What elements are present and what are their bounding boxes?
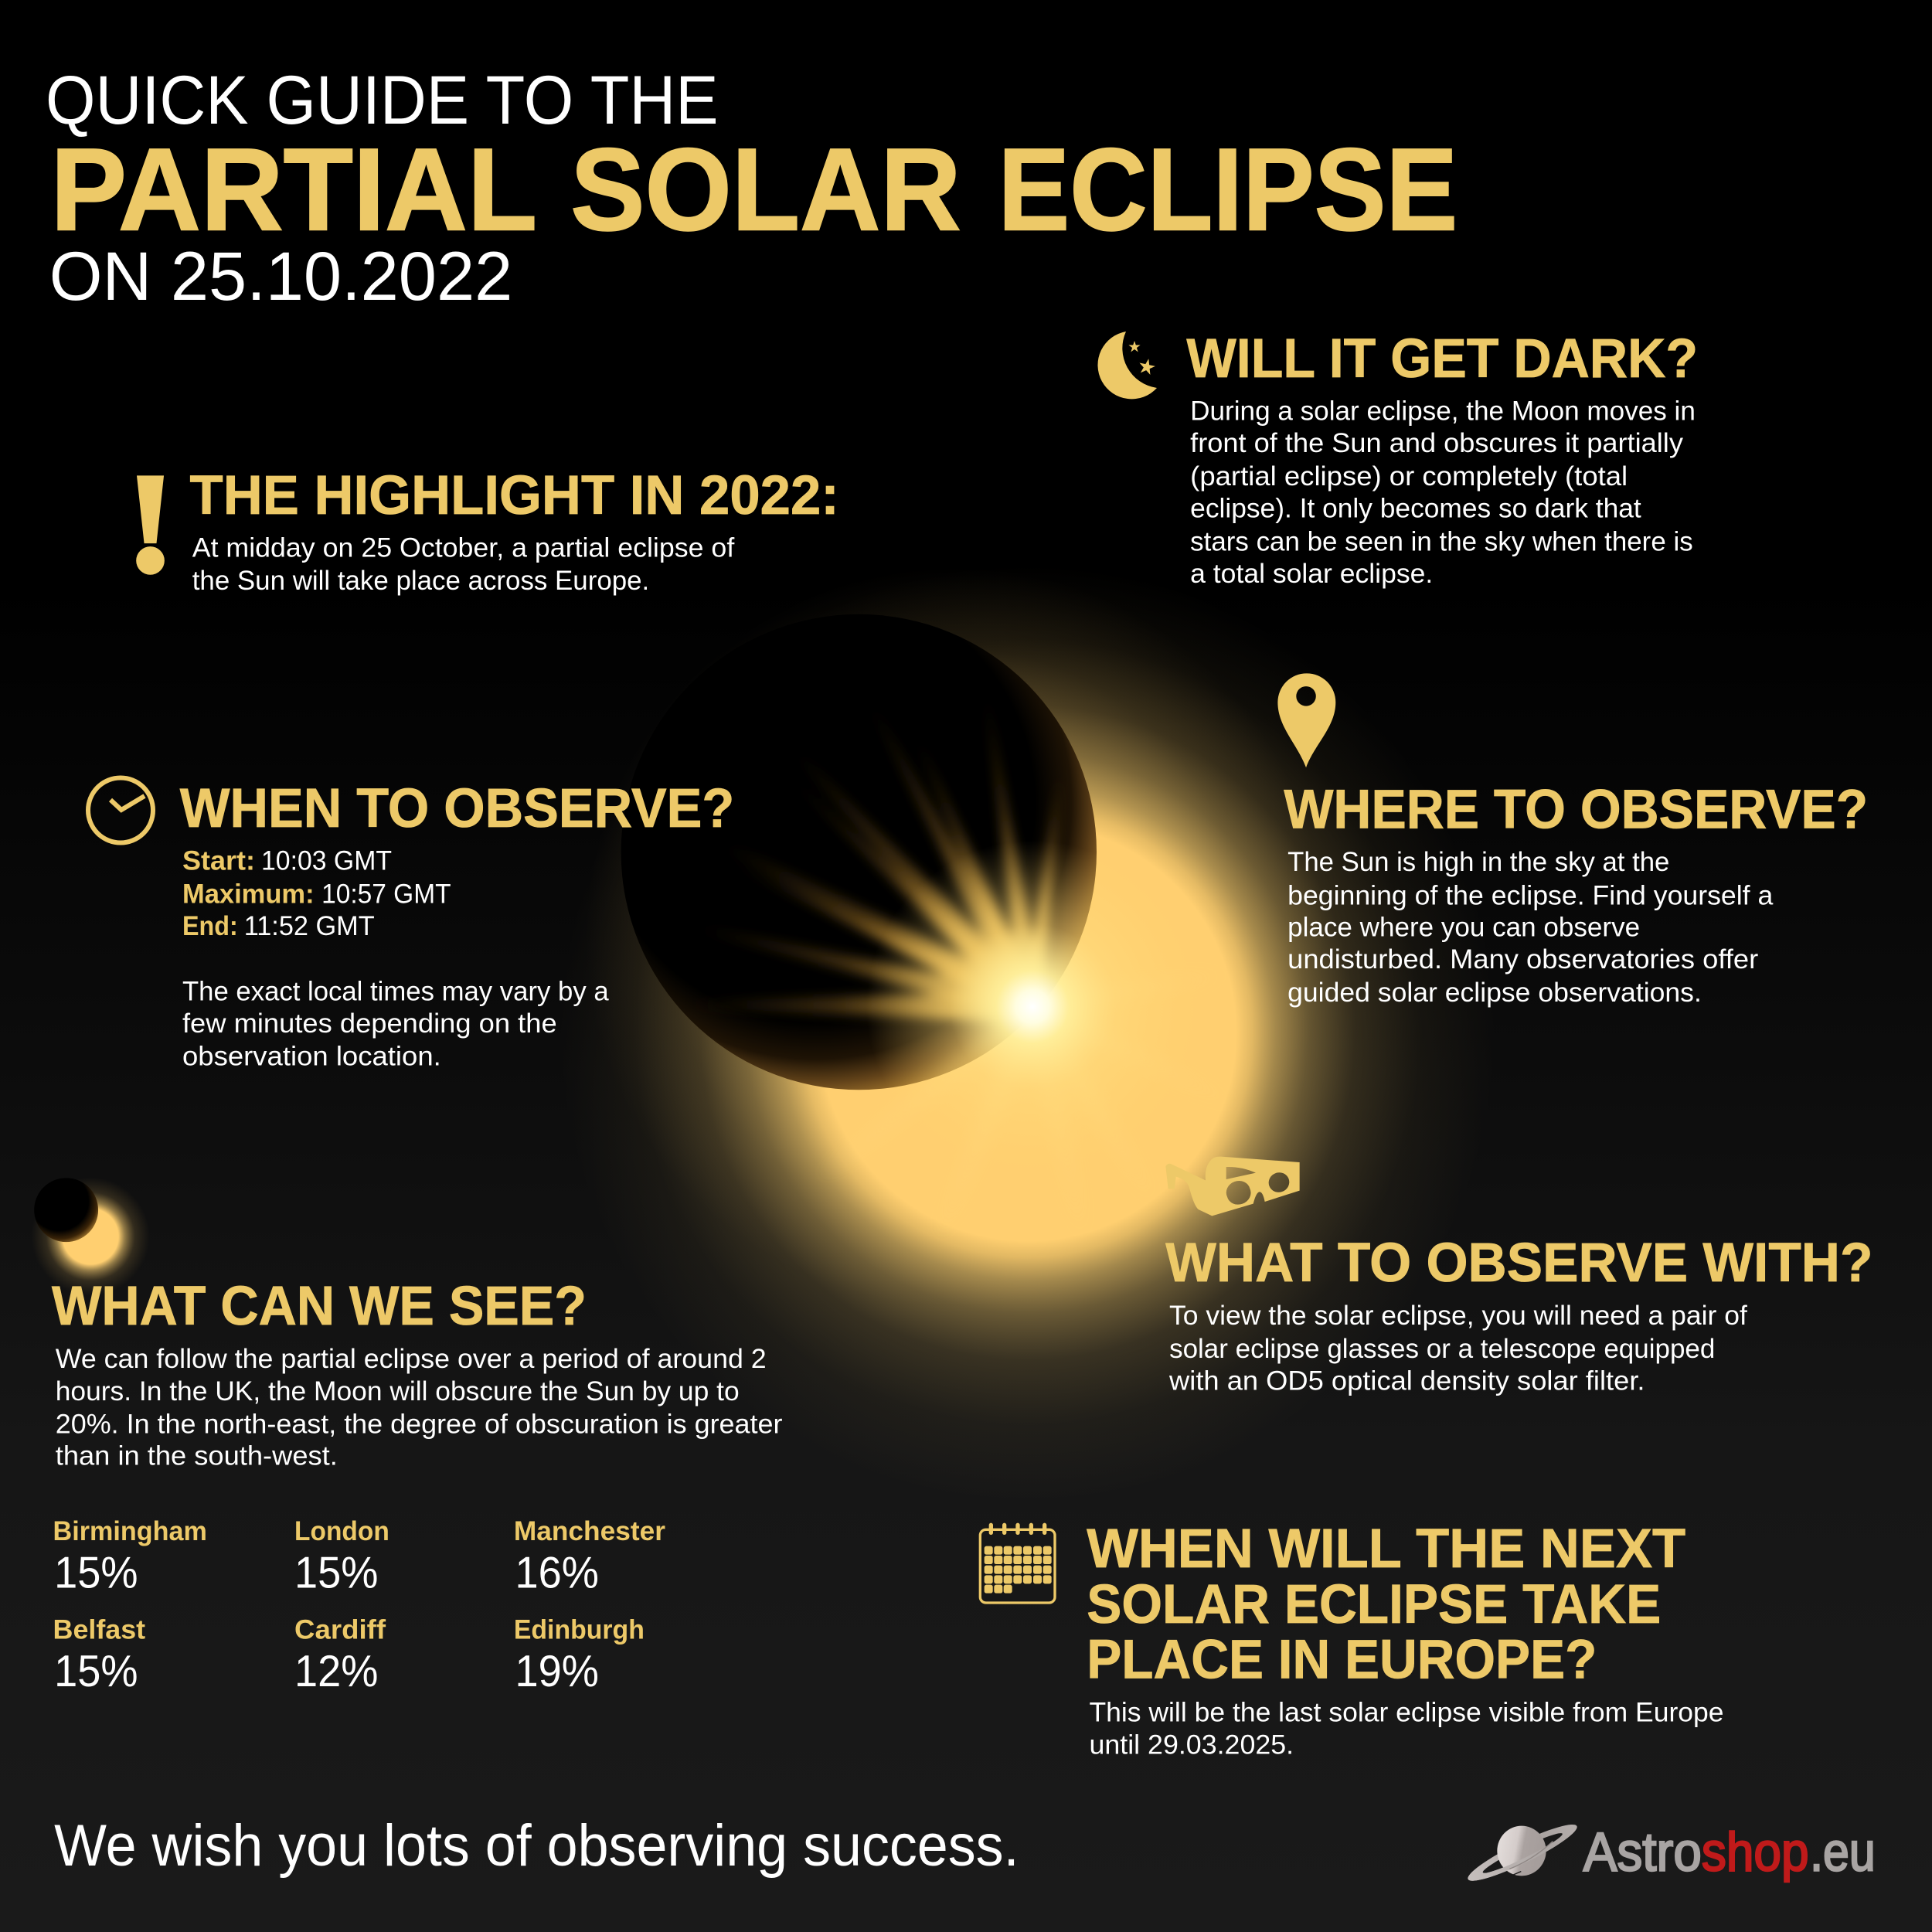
city percentages <box>53 1516 665 1696</box>
body text: observation location. <box>182 1041 441 1071</box>
title: PARTIAL <box>50 124 537 255</box>
body text: During a solar eclipse, the Moon moves in <box>1190 396 1696 427</box>
wordmark <box>1583 1821 1876 1882</box>
times <box>182 846 451 941</box>
body text <box>192 533 735 596</box>
body text <box>1287 847 1774 1008</box>
city percentages: 12% <box>294 1647 378 1696</box>
city percentages: Edinburgh <box>514 1615 645 1645</box>
title: SOLAR <box>570 124 961 255</box>
city percentages: Manchester <box>514 1516 665 1546</box>
times: Maximum: <box>182 879 315 910</box>
wordmark: shop <box>1702 1821 1809 1882</box>
times: 11:52 GMT <box>244 911 375 941</box>
closing message: We wish you lots of observing success. <box>54 1813 1019 1879</box>
body text: (partial eclipse) or completely (total <box>1190 461 1628 492</box>
body text: eclipse). It only becomes so dark that <box>1190 494 1641 524</box>
body text: guided solar eclipse observations. <box>1287 978 1702 1008</box>
icon: location pin <box>1277 673 1335 767</box>
body text <box>1168 1301 1747 1396</box>
wordmark: .eu <box>1810 1821 1876 1882</box>
icon: calendar <box>980 1523 1055 1603</box>
panel: what can we see <box>32 1177 783 1696</box>
body text: until 29.03.2025. <box>1089 1730 1294 1760</box>
body text <box>56 1344 783 1471</box>
city percentages: 15% <box>294 1548 378 1597</box>
body text: The Sun is high in the sky at the <box>1287 847 1669 877</box>
icon: crescent moon and stars <box>1097 332 1157 399</box>
city percentages: Belfast <box>53 1615 145 1645</box>
body text: few minutes depending on the <box>182 1009 557 1039</box>
body text: front of the Sun and obscures it partially <box>1190 428 1683 458</box>
panel: when to observe <box>88 777 734 1071</box>
city percentages: 15% <box>54 1647 138 1696</box>
body text: the Sun will take place across Europe. <box>192 566 649 596</box>
body text: To view the solar eclipse, you will need a pair of <box>1169 1301 1747 1331</box>
times: Start: <box>182 846 255 876</box>
wordmark: Astro <box>1583 1821 1702 1882</box>
city percentages: Birmingham <box>53 1516 207 1546</box>
eclipse illustration <box>560 564 1496 1501</box>
body text: place where you can observe <box>1287 913 1640 943</box>
body text: We can follow the partial eclipse over a period of around 2 <box>56 1344 767 1374</box>
body text: than in the south-west. <box>56 1441 338 1471</box>
title <box>46 61 1458 315</box>
heading: WHEN TO OBSERVE? <box>180 777 734 839</box>
times: End: <box>182 911 238 941</box>
body text <box>1190 396 1696 589</box>
heading <box>1087 1518 1685 1691</box>
body text: 20%. In the north-east, the degree of obscuration is greater <box>56 1409 783 1439</box>
city percentages: 19% <box>515 1647 599 1696</box>
body text <box>182 977 609 1071</box>
heading: PLACE IN EUROPE? <box>1087 1629 1597 1691</box>
icon: small eclipse <box>32 1177 150 1295</box>
heading: WHERE TO OBSERVE? <box>1284 778 1868 840</box>
heading: SOLAR ECLIPSE TAKE <box>1087 1573 1661 1635</box>
panel: where to observe <box>1277 673 1868 1008</box>
panel: next solar eclipse <box>980 1518 1724 1760</box>
body text: At midday on 25 October, a partial eclipse of <box>192 533 735 563</box>
body text: hours. In the UK, the Moon will obscure the Sun by up to <box>56 1376 740 1406</box>
body text: a total solar eclipse. <box>1190 559 1433 589</box>
city percentages: 16% <box>515 1548 599 1597</box>
heading: WHAT CAN WE SEE? <box>52 1275 587 1337</box>
city percentages: London <box>294 1516 389 1546</box>
panel: what to observe with <box>1165 1157 1872 1396</box>
heading: THE HIGHLIGHT IN 2022: <box>190 464 839 526</box>
title: QUICK GUIDE TO THE <box>46 61 719 138</box>
title: ON 25.10.2022 <box>49 237 512 315</box>
icon: ringed planet <box>1464 1817 1581 1889</box>
icon: exclamation mark <box>136 475 165 575</box>
body text: This will be the last solar eclipse visible from Europe <box>1089 1697 1724 1727</box>
times: 10:03 GMT <box>261 846 392 876</box>
body text: The exact local times may vary by a <box>182 977 609 1007</box>
icon: eclipse glasses <box>1165 1157 1300 1216</box>
heading: WHEN WILL THE NEXT <box>1087 1518 1685 1580</box>
body text <box>1089 1697 1724 1760</box>
panel: will it get dark <box>1097 328 1698 589</box>
heading: WHAT TO OBSERVE WITH? <box>1165 1232 1872 1294</box>
title: ECLIPSE <box>998 124 1458 255</box>
body text: stars can be seen in the sky when there is <box>1190 527 1693 557</box>
panel: highlight in 2022 <box>136 464 839 596</box>
times: 10:57 GMT <box>321 879 451 910</box>
body text: with an OD5 optical density solar filter. <box>1168 1366 1645 1396</box>
icon: clock <box>88 777 153 842</box>
body text: undisturbed. Many observatories offer <box>1287 944 1759 975</box>
heading: WILL IT GET DARK? <box>1186 328 1698 389</box>
city percentages: 15% <box>54 1548 138 1597</box>
body text: beginning of the eclipse. Find yourself a <box>1287 880 1774 910</box>
body text: solar eclipse glasses or a telescope equipped <box>1169 1334 1715 1364</box>
city percentages: Cardiff <box>294 1615 386 1645</box>
logo: Astroshop.eu <box>1464 1817 1876 1889</box>
